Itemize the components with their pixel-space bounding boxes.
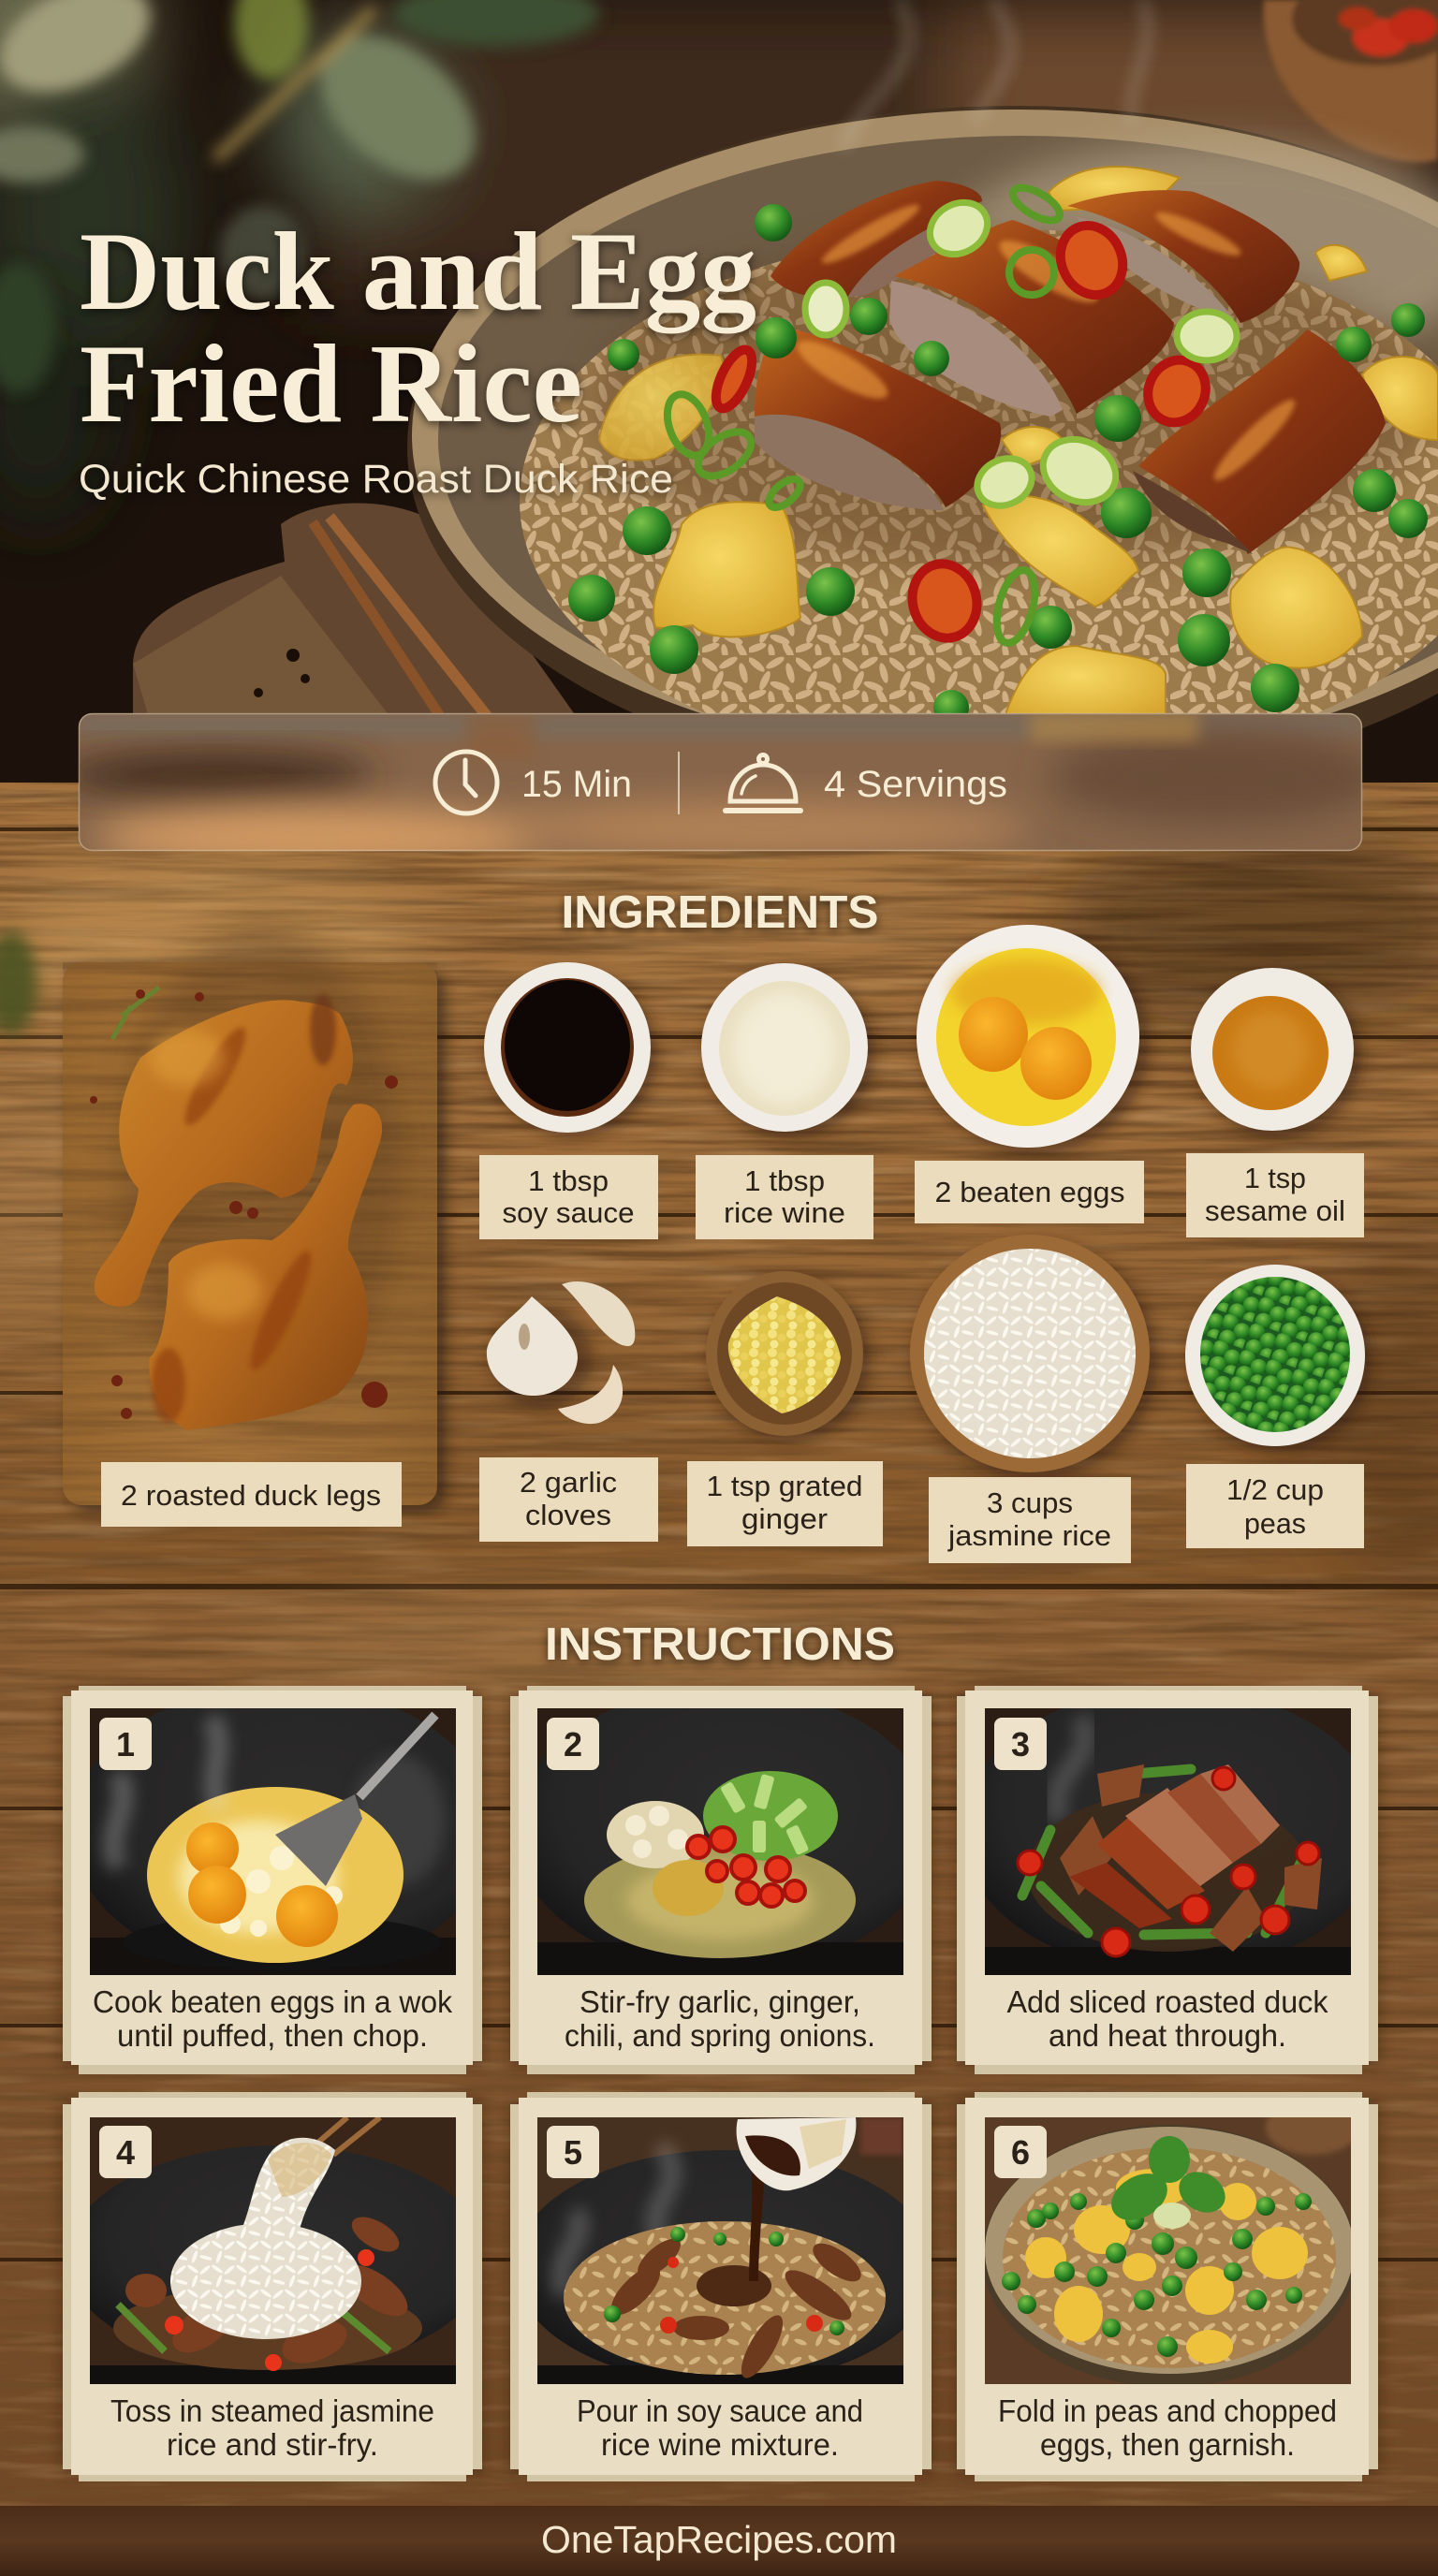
ingredient: duck legs on board (63, 927, 446, 1513)
label: rice: 3 cups (987, 1486, 1073, 1519)
label: sesame oil: 1 tsp (1244, 1162, 1306, 1194)
step 5 photo (537, 2117, 903, 2384)
step 1 text: Cook beaten eggs in a wok (93, 1984, 452, 2019)
step 2 text (565, 1984, 875, 2053)
step 1 text (93, 1984, 452, 2053)
steam (843, 0, 1148, 150)
step 6 photo (985, 2117, 1351, 2384)
badge 6 (994, 2126, 1047, 2178)
step 4 text: rice and stir-fry. (167, 2427, 378, 2462)
step 1 text: until puffed, then chop. (117, 2018, 428, 2053)
step card 6 (957, 2092, 1378, 2481)
heading: ingredients: INGREDIENTS (562, 887, 878, 938)
time text: 15 Min (521, 764, 632, 805)
ingredient: rice wine bowl (701, 963, 874, 1138)
step 3 text: and heat through. (1049, 2018, 1286, 2053)
subtitle: Quick Chinese Roast Duck Rice (79, 457, 673, 502)
badge 4 (99, 2126, 152, 2178)
badge 2 (547, 1718, 599, 1770)
peas (568, 204, 1428, 725)
step 3 photo (985, 1708, 1351, 1975)
label: ginger (687, 1461, 883, 1546)
ingredient: peas bowl (1185, 1265, 1372, 1453)
divider (678, 752, 680, 814)
badge 3 (994, 1718, 1047, 1770)
duck label: 2 roasted duck legs (121, 1479, 381, 1512)
step 1 photo (90, 1708, 456, 1975)
heading: instructions: INSTRUCTIONS (545, 1619, 895, 1670)
background: wood table (0, 783, 1438, 2576)
label: eggs (915, 1161, 1144, 1223)
ingredient: sesame oil bowl (1191, 968, 1361, 1138)
step 5 text (577, 2393, 863, 2462)
hero photo: fried rice bowl on dark backdrop (0, 0, 1438, 789)
ingredient: jasmine rice bowl (910, 1235, 1157, 1480)
ingredient: garlic (487, 1281, 635, 1424)
title (80, 209, 756, 446)
title: Fried Rice (80, 321, 582, 446)
backdrop warm tones (0, 0, 1438, 524)
ingredient: eggs bowl (917, 925, 1150, 1155)
footer (0, 2506, 1438, 2576)
footer: OneTapRecipes.com (541, 2518, 897, 2561)
blurred leaves (0, 0, 599, 393)
badge 1: 1 (116, 1725, 135, 1764)
step 2 text: chili, and spring onions. (565, 2018, 875, 2053)
badge 6: 6 (1011, 2133, 1030, 2172)
label: rice wine: 1 tbsp (744, 1164, 825, 1197)
stats bar (56, 713, 1386, 870)
label: eggs: 2 beaten eggs (934, 1176, 1125, 1208)
spring onion rings (805, 192, 1237, 514)
label: soy sauce: 1 tbsp (528, 1164, 609, 1197)
servings text: 4 Servings (824, 764, 1007, 805)
duck pieces (755, 181, 1386, 554)
step card 1 (63, 1685, 492, 2074)
duck leg upper (95, 1000, 353, 1307)
badge 4: 4 (116, 2133, 135, 2172)
chili rings (709, 215, 1216, 645)
badge 5: 5 (564, 2133, 582, 2172)
label: ginger: 1 tsp grated (706, 1470, 863, 1502)
small chili bowl (1264, 0, 1438, 162)
bowl (407, 106, 1438, 789)
badge 1 (99, 1718, 152, 1770)
step 2 text: Stir-fry garlic, ginger, (580, 1984, 860, 2019)
duck label (101, 1462, 402, 1527)
step card 5 (510, 2092, 935, 2481)
icon: serving cloche (726, 754, 800, 811)
label: garlic (479, 1457, 658, 1542)
step 3 text (1007, 1984, 1328, 2053)
label: rice (929, 1477, 1131, 1563)
step 2 photo (537, 1708, 903, 1975)
step 5 text: Pour in soy sauce and (577, 2393, 863, 2428)
label: garlic: 2 garlic (520, 1466, 617, 1499)
label: sesame oil: sesame oil (1205, 1194, 1345, 1227)
step 3 text: Add sliced roasted duck (1007, 1984, 1328, 2019)
step card 2 (510, 1686, 935, 2074)
label: rice: jasmine rice (947, 1519, 1111, 1552)
step 4 photo (90, 2117, 456, 2384)
label: peas (1186, 1464, 1364, 1548)
label: rice wine: rice wine (724, 1196, 845, 1229)
duck leg lower (149, 1104, 382, 1430)
step card 3 (957, 1686, 1383, 2074)
step card 4 (63, 2092, 488, 2481)
label: garlic: cloves (525, 1499, 611, 1531)
step 4 text: Toss in steamed jasmine (110, 2393, 434, 2428)
label: rice wine (696, 1155, 873, 1239)
ingredient: soy sauce bowl (484, 962, 657, 1138)
icon: clock (435, 752, 497, 813)
label: peas: peas (1244, 1507, 1306, 1540)
step 6 text: Fold in peas and chopped (998, 2393, 1337, 2428)
badge 3: 3 (1011, 1725, 1030, 1764)
label: soy sauce: soy sauce (502, 1196, 635, 1229)
wooden board and chopsticks (133, 504, 599, 749)
title: Duck and Egg (80, 209, 756, 334)
label: soy sauce (479, 1155, 658, 1239)
step 6 text: eggs, then garnish. (1040, 2427, 1295, 2462)
step 6 text (998, 2393, 1337, 2462)
badge 2: 2 (564, 1725, 582, 1764)
label: sesame oil (1186, 1153, 1364, 1237)
egg pieces (599, 167, 1438, 721)
step 4 text (110, 2393, 434, 2462)
ingredient: ginger bowl (706, 1271, 871, 1442)
badge 5 (547, 2126, 599, 2178)
label: peas: 1/2 cup (1226, 1473, 1324, 1506)
step 5 text: rice wine mixture. (601, 2427, 839, 2462)
label: ginger: ginger (741, 1502, 828, 1535)
